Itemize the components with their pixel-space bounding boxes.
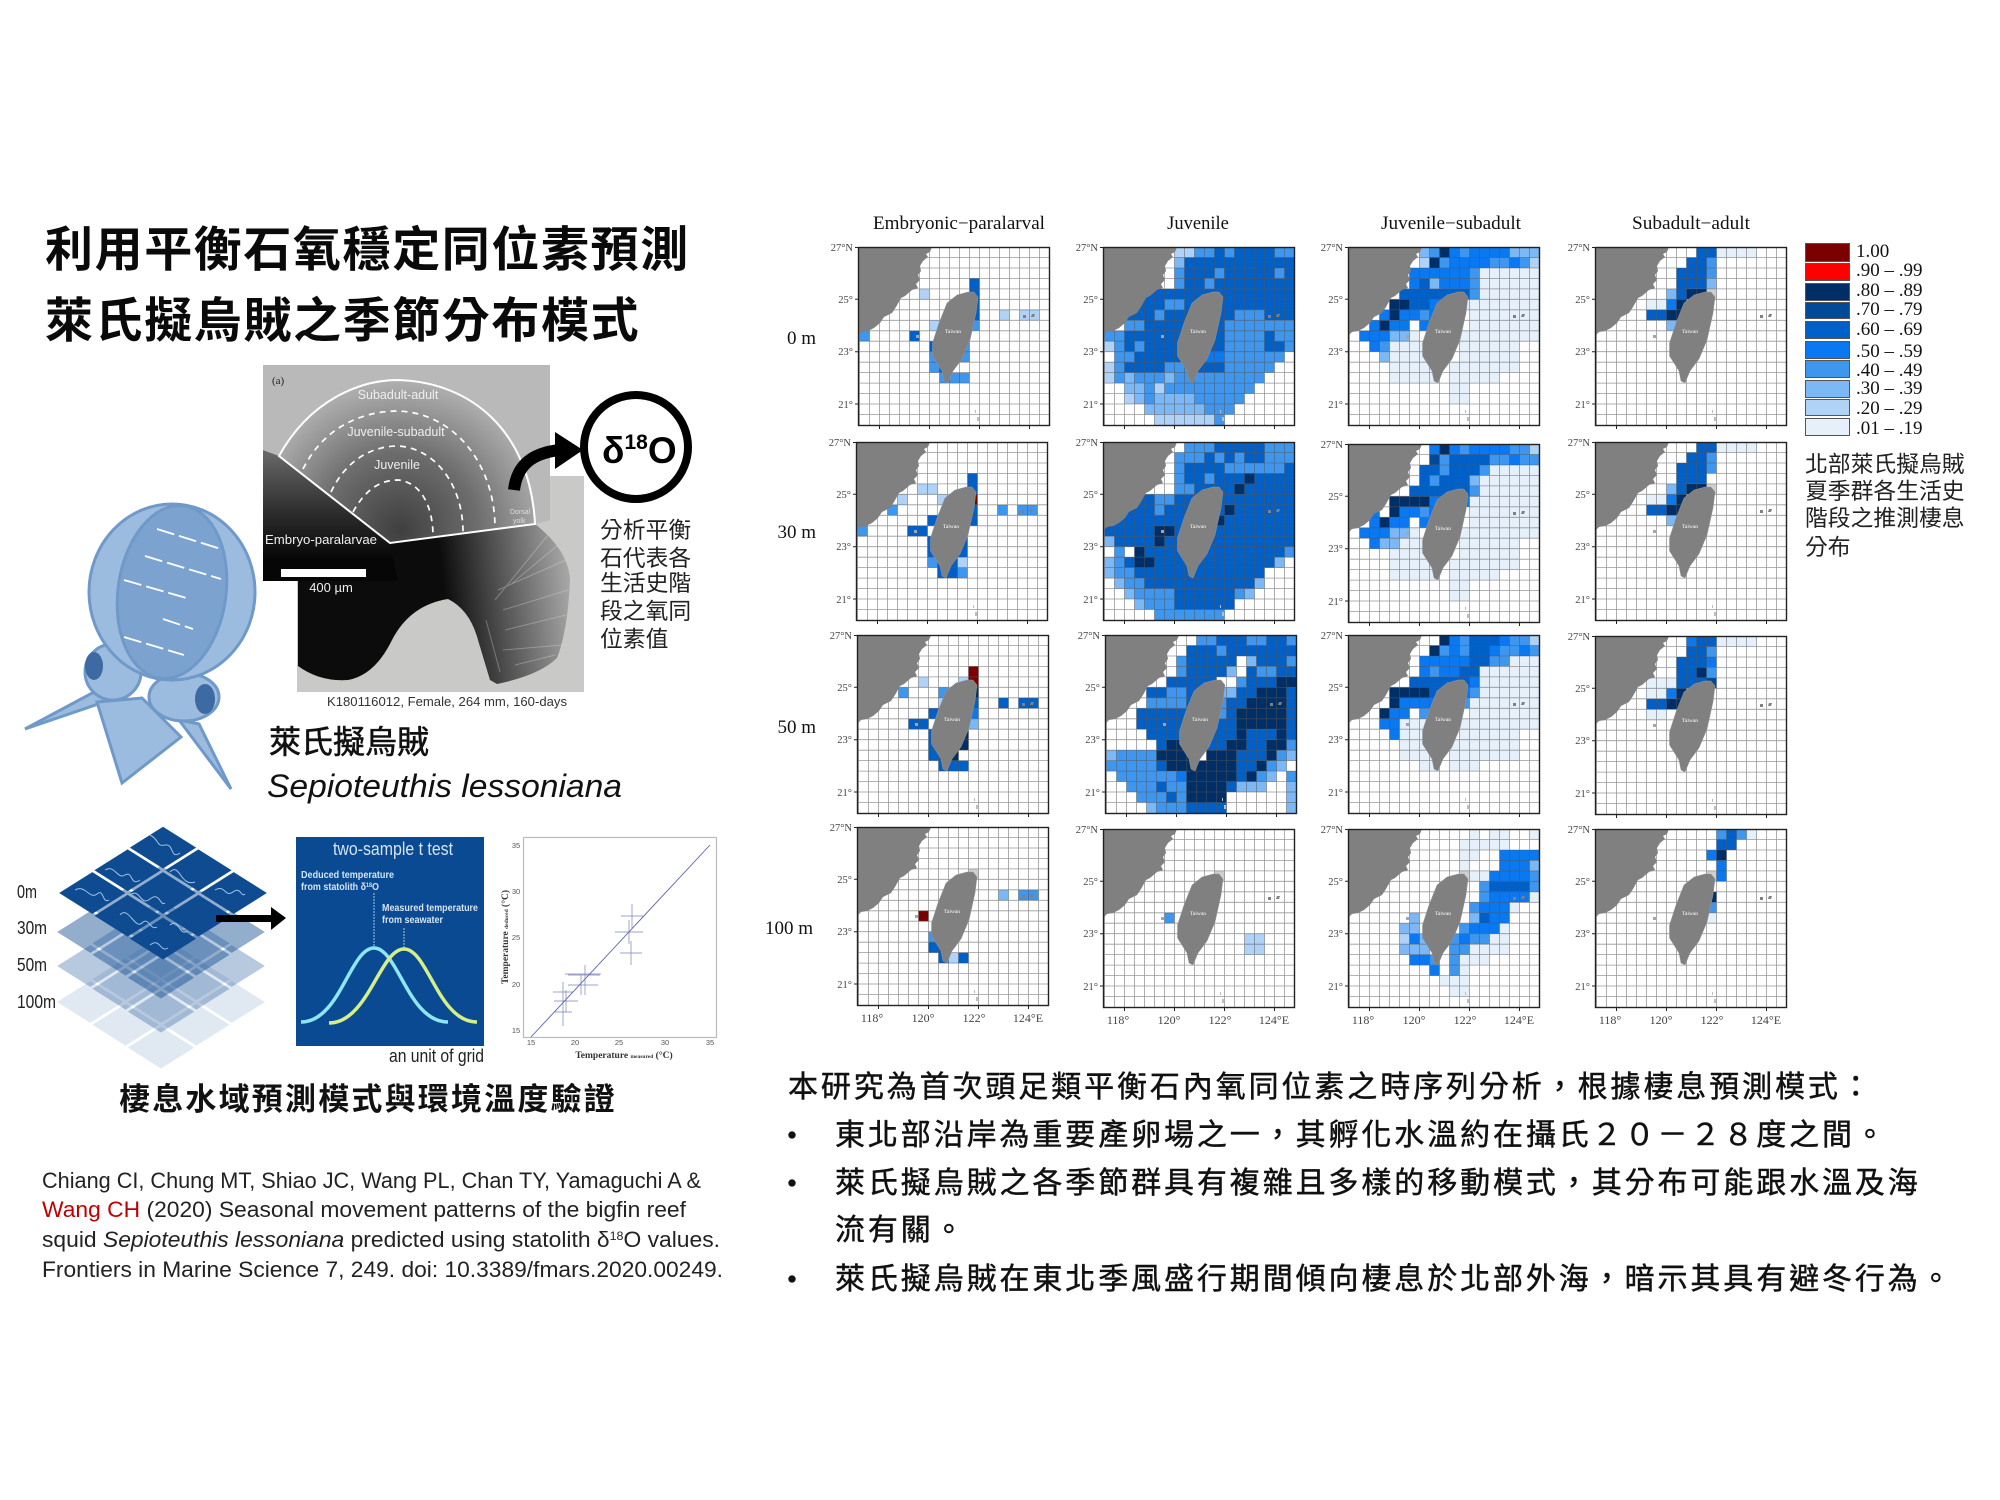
row label: 100 m: 100 m: [765, 918, 813, 939]
map: Embryonic 100 m: 124°E: [1013, 1011, 1043, 1025]
map: Embryonic 50 m: 23°: [837, 735, 852, 746]
text: statolith analysis note: 分析平衡: [600, 517, 691, 543]
citation: 18: [610, 1229, 624, 1243]
map: Juvenile-subadult 50 m: 23°: [1328, 735, 1343, 746]
map: Juvenile 0 m: 21°: [1083, 400, 1098, 411]
statolith photograph: Juvenile: [374, 458, 420, 472]
map: Subadult-adult 0 m: 25°: [1575, 295, 1590, 306]
map: Embryonic 50 m: [830, 631, 1049, 817]
map: Subadult-adult 50 m: 27°N: [1568, 632, 1590, 643]
icon: delta 18 O circle: 18: [624, 431, 648, 454]
icon: delta 18 O circle: O: [648, 430, 677, 471]
map: Subadult-adult 50 m: [1568, 632, 1787, 818]
title: [45, 224, 690, 348]
map: Juvenile 50 m: 21°: [1085, 788, 1100, 799]
scatter chart: deduced vs measured temperature: Temperature measured (°C): [575, 1050, 673, 1061]
legend: .60 – .69: [1856, 319, 1922, 340]
map: Subadult-adult 50 m: 25°: [1575, 684, 1590, 695]
map: Juvenile 50 m: 23°: [1085, 735, 1100, 746]
statolith photograph: Dorsal: [510, 509, 531, 516]
map: Embryonic 30 m: 27°N: [829, 438, 851, 449]
depth layer diagram: 0m: [17, 882, 37, 902]
species name: Sepioteuthis lessoniana: [267, 768, 622, 804]
map: Juvenile-subadult 0 m: 25°: [1328, 295, 1343, 306]
text: summer stock caption: 階段之推測棲息: [1805, 505, 1965, 531]
text: summer stock caption: 夏季群各生活史: [1805, 478, 1965, 504]
text: conclusions: 萊氏擬烏賊之各季節群具有複雜且多樣的移動模式，其分布可能跟水溫及海: [835, 1167, 1921, 1200]
panel: two-sample t test: [296, 837, 484, 1046]
panel: two-sample t test: 18: [366, 883, 373, 889]
map: Embryonic 100 m: 25°: [837, 875, 852, 886]
map: Juvenile 100 m: 124°E: [1259, 1013, 1289, 1027]
map: Juvenile-subadult 100 m: 124°E: [1504, 1013, 1534, 1027]
scatter chart: deduced vs measured temperature: [500, 838, 716, 1061]
map: Juvenile-subadult 100 m: [1321, 825, 1540, 1027]
scatter chart: deduced vs measured temperature: 35: [512, 841, 520, 850]
text: conclusions: 流有關。: [835, 1214, 967, 1247]
panel: two-sample t test: O: [372, 882, 379, 893]
row label: 0 m: 0 m: [787, 328, 816, 349]
citation: Wang CH (2020) Seasonal movement patterns of the bigfin reef: [42, 1197, 687, 1222]
map: Embryonic 50 m: 25°: [837, 683, 852, 694]
map: Juvenile 30 m: 27°N: [1076, 438, 1098, 449]
map: Juvenile 50 m: 27°N: [1078, 631, 1100, 642]
panel: two-sample t test: two-sample t test: [333, 839, 453, 859]
map: Juvenile 100 m: 118°: [1107, 1013, 1129, 1027]
legend: .80 – .89: [1856, 280, 1922, 301]
map: Juvenile 30 m: 25°: [1083, 490, 1098, 501]
map: Embryonic 100 m: [830, 823, 1049, 1025]
map: Juvenile-subadult 30 m: [1321, 440, 1540, 626]
arrow: layers to t test: [216, 907, 286, 930]
map: Subadult-adult 0 m: 27°N: [1568, 243, 1590, 254]
scatter chart: deduced vs measured temperature: Temperature deduced (°C): [500, 890, 511, 984]
map: Juvenile-subadult 0 m: 23°: [1328, 347, 1343, 358]
row label: 30 m: 30 m: [777, 522, 816, 543]
text: statolith analysis note: 位素值: [600, 626, 668, 652]
panel: two-sample t test: from statolith δ: [301, 882, 374, 893]
map: Juvenile-subadult 50 m: [1321, 631, 1540, 817]
panel: two-sample t test: from seawater: [382, 914, 443, 926]
map: Juvenile 100 m: 21°: [1083, 982, 1098, 993]
map: Juvenile 0 m: 27°N: [1076, 243, 1098, 254]
panel: two-sample t test: Measured temperature: [382, 902, 478, 914]
scatter chart: deduced vs measured temperature: 30: [661, 1038, 669, 1047]
map: Subadult-adult 100 m: 27°N: [1568, 825, 1590, 836]
statolith photograph: (a): [272, 375, 285, 387]
map: Juvenile-subadult 50 m: 27°N: [1321, 631, 1343, 642]
legend: 1.00: [1856, 241, 1889, 262]
depth layer diagram: 100m: [17, 992, 56, 1012]
arrow: statolith to delta 18 O: [514, 432, 583, 490]
text: statolith analysis note: 生活史階: [600, 570, 691, 596]
map: Juvenile 100 m: 120°: [1158, 1013, 1181, 1027]
map: Subadult-adult 30 m: 21°: [1575, 595, 1590, 606]
scatter chart: deduced vs measured temperature: 15: [512, 1026, 520, 1035]
map: Juvenile-subadult 0 m: 27°N: [1321, 243, 1343, 254]
text: summer stock caption: 分布: [1805, 534, 1851, 560]
map: Embryonic 50 m: 21°: [837, 788, 852, 799]
map: Subadult-adult 0 m: 21°: [1575, 400, 1590, 411]
map: Juvenile-subadult 100 m: 21°: [1328, 982, 1343, 993]
depth layer diagram: 50m: [17, 955, 47, 975]
map: Juvenile-subadult 30 m: 21°: [1328, 597, 1343, 608]
map: Subadult-adult 30 m: 23°: [1575, 542, 1590, 553]
scatter chart: deduced vs measured temperature: 35: [706, 1038, 714, 1047]
map: Juvenile 0 m: 25°: [1083, 295, 1098, 306]
squid illustration: [25, 498, 255, 789]
map: Embryonic 50 m: 27°N: [830, 631, 852, 642]
map: Juvenile-subadult 100 m: 118°: [1352, 1013, 1374, 1027]
text: summer stock caption: 北部萊氏擬烏賊: [1805, 451, 1965, 477]
text: statolith analysis note: [600, 517, 691, 652]
statolith photograph: Subadult-adult: [358, 388, 439, 402]
legend: .40 – .49: [1856, 360, 1922, 381]
map: Juvenile-subadult 30 m: 25°: [1328, 492, 1343, 503]
panel: two-sample t test: Deduced temperature: [301, 869, 394, 881]
scatter chart: deduced vs measured temperature: 25: [512, 933, 520, 942]
map: Juvenile 50 m: [1078, 631, 1297, 817]
column heading: Embryonic-paralarval: Embryonic−paralarval: [873, 214, 1045, 234]
map: Juvenile 100 m: [1076, 825, 1295, 1027]
text: statolith analysis note: 石代表各: [600, 545, 691, 571]
scatter chart: deduced vs measured temperature: 15: [527, 1038, 535, 1047]
map: Juvenile-subadult 30 m: 23°: [1328, 544, 1343, 555]
depth layer diagram: [17, 827, 267, 1069]
map: Juvenile-subadult 100 m: 25°: [1328, 877, 1343, 888]
map: Subadult-adult 100 m: 124°E: [1751, 1013, 1781, 1027]
legend: .50 – .59: [1856, 341, 1922, 362]
title: 萊氏擬烏賊之季節分布模式: [45, 295, 640, 348]
map: Embryonic 0 m: 27°N: [831, 243, 853, 254]
heading: habitat prediction model: 棲息水域預測模式與環境溫度驗證: [119, 1082, 617, 1117]
map: Embryonic 30 m: 25°: [836, 490, 851, 501]
map: Juvenile-subadult 100 m: 122°: [1454, 1013, 1477, 1027]
map: Embryonic 100 m: 27°N: [830, 823, 852, 834]
scatter chart: deduced vs measured temperature: 30: [512, 887, 520, 896]
legend: .01 – .19: [1856, 418, 1922, 439]
statolith photograph: 400 µm: [309, 580, 353, 595]
map: Embryonic 100 m: 23°: [837, 927, 852, 938]
map: Embryonic 100 m: 21°: [837, 980, 852, 991]
map: Subadult-adult 30 m: [1568, 438, 1787, 624]
scatter chart: deduced vs measured temperature: 25: [615, 1038, 623, 1047]
map: Juvenile-subadult 50 m: 25°: [1328, 683, 1343, 694]
map: Subadult-adult 100 m: [1568, 825, 1787, 1027]
citation: O values.: [624, 1227, 720, 1252]
text: conclusions: 東北部沿岸為重要產卵場之一，其孵化水溫約在攝氏２０－２８度之間。: [835, 1119, 1888, 1152]
citation: [42, 1168, 723, 1282]
map: Juvenile-subadult 0 m: [1321, 243, 1540, 429]
label: unit of grid: an unit of grid: [389, 1046, 484, 1066]
map: Juvenile-subadult 100 m: 120°: [1403, 1013, 1426, 1027]
species name: [267, 724, 622, 804]
map: Juvenile-subadult 100 m: 23°: [1328, 929, 1343, 940]
map: Subadult-adult 50 m: 23°: [1575, 736, 1590, 747]
map: Juvenile 100 m: 25°: [1083, 877, 1098, 888]
map: Embryonic 0 m: 21°: [838, 400, 853, 411]
legend: .70 – .79: [1856, 299, 1922, 320]
map: Embryonic 0 m: 25°: [838, 295, 853, 306]
legend: .20 – .29: [1856, 398, 1922, 419]
scatter chart: deduced vs measured temperature: 20: [571, 1038, 579, 1047]
map: Subadult-adult 100 m: 21°: [1575, 982, 1590, 993]
map: Subadult-adult 0 m: 23°: [1575, 347, 1590, 358]
map: Juvenile 100 m: 23°: [1083, 929, 1098, 940]
text: conclusions: 萊氏擬烏賊在東北季風盛行期間傾向棲息於北部外海，暗示其具有避冬行為。: [835, 1263, 1954, 1296]
map: Juvenile 30 m: [1076, 438, 1295, 624]
map: Embryonic 0 m: [831, 243, 1050, 429]
map: Embryonic 100 m: 118°: [861, 1011, 883, 1025]
map: Subadult-adult 50 m: 21°: [1575, 789, 1590, 800]
column heading: Juvenile-subadult: Juvenile−subadult: [1381, 214, 1522, 234]
text: conclusions: [788, 1071, 1954, 1296]
legend: .30 – .39: [1856, 378, 1922, 399]
legend: .90 – .99: [1856, 260, 1922, 281]
map: Subadult-adult 100 m: 25°: [1575, 877, 1590, 888]
text: conclusions: 本研究為首次頭足類平衡石內氧同位素之時序列分析，根據棲息預測模式：: [788, 1071, 1874, 1104]
map: Embryonic 100 m: 122°: [963, 1011, 986, 1025]
text: summer stock caption: [1805, 451, 1965, 560]
map: Juvenile 0 m: 23°: [1083, 347, 1098, 358]
map: Juvenile-subadult 100 m: 27°N: [1321, 825, 1343, 836]
icon: delta 18 O circle: [584, 395, 688, 499]
statolith photograph: Embryo-paralarvae: [265, 533, 377, 547]
map: Juvenile 30 m: 21°: [1083, 595, 1098, 606]
row label: 50 m: 50 m: [777, 717, 816, 738]
map: Embryonic 30 m: 21°: [836, 595, 851, 606]
map: Juvenile 50 m: 25°: [1085, 683, 1100, 694]
statolith photograph: K180116012, Female, 264 mm, 160-days: [327, 695, 567, 709]
map: Juvenile 0 m: [1076, 243, 1295, 429]
map: Juvenile-subadult 0 m: 21°: [1328, 400, 1343, 411]
citation: Chiang CI, Chung MT, Shiao JC, Wang PL, Chan TY, Yamaguchi A &: [42, 1168, 701, 1193]
map: Subadult-adult 100 m: 118°: [1599, 1013, 1621, 1027]
citation: Frontiers in Marine Science 7, 249. doi: 10.3389/fmars.2020.00249.: [42, 1257, 723, 1282]
map: Subadult-adult 100 m: 122°: [1701, 1013, 1724, 1027]
species name: 萊氏擬烏賊: [269, 724, 429, 760]
map: Embryonic 30 m: [829, 438, 1048, 624]
map: Subadult-adult 30 m: 27°N: [1568, 438, 1590, 449]
map: Subadult-adult 0 m: [1568, 243, 1787, 429]
statolith photograph: [263, 365, 584, 709]
map: Juvenile 100 m: 122°: [1209, 1013, 1232, 1027]
map: Juvenile-subadult 30 m: 27°N: [1321, 440, 1343, 451]
map: Subadult-adult 100 m: 120°: [1650, 1013, 1673, 1027]
map: Subadult-adult 100 m: 23°: [1575, 929, 1590, 940]
scatter chart: deduced vs measured temperature: 20: [512, 980, 520, 989]
map: Subadult-adult 30 m: 25°: [1575, 490, 1590, 501]
depth layer diagram: 30m: [17, 918, 47, 938]
map: Embryonic 30 m: 23°: [836, 542, 851, 553]
legend: [1806, 241, 1922, 439]
title: 利用平衡石氧穩定同位素預測: [45, 224, 690, 277]
map: Juvenile-subadult 50 m: 21°: [1328, 788, 1343, 799]
column heading: Juvenile: Juvenile: [1167, 214, 1229, 234]
map: Embryonic 100 m: 120°: [912, 1011, 935, 1025]
map: Juvenile 100 m: 27°N: [1076, 825, 1098, 836]
map: Juvenile 30 m: 23°: [1083, 542, 1098, 553]
map: Embryonic 0 m: 23°: [838, 347, 853, 358]
citation: squid Sepioteuthis lessoniana predicted using statolith δ: [42, 1227, 600, 1252]
statolith photograph: Juvenile-subadult: [347, 425, 445, 439]
statolith photograph: yolk: [513, 518, 526, 525]
column heading: Subadult-adult: Subadult−adult: [1632, 214, 1751, 234]
icon: delta 18 O circle: δ: [602, 430, 624, 471]
text: statolith analysis note: 段之氧同: [600, 598, 691, 624]
